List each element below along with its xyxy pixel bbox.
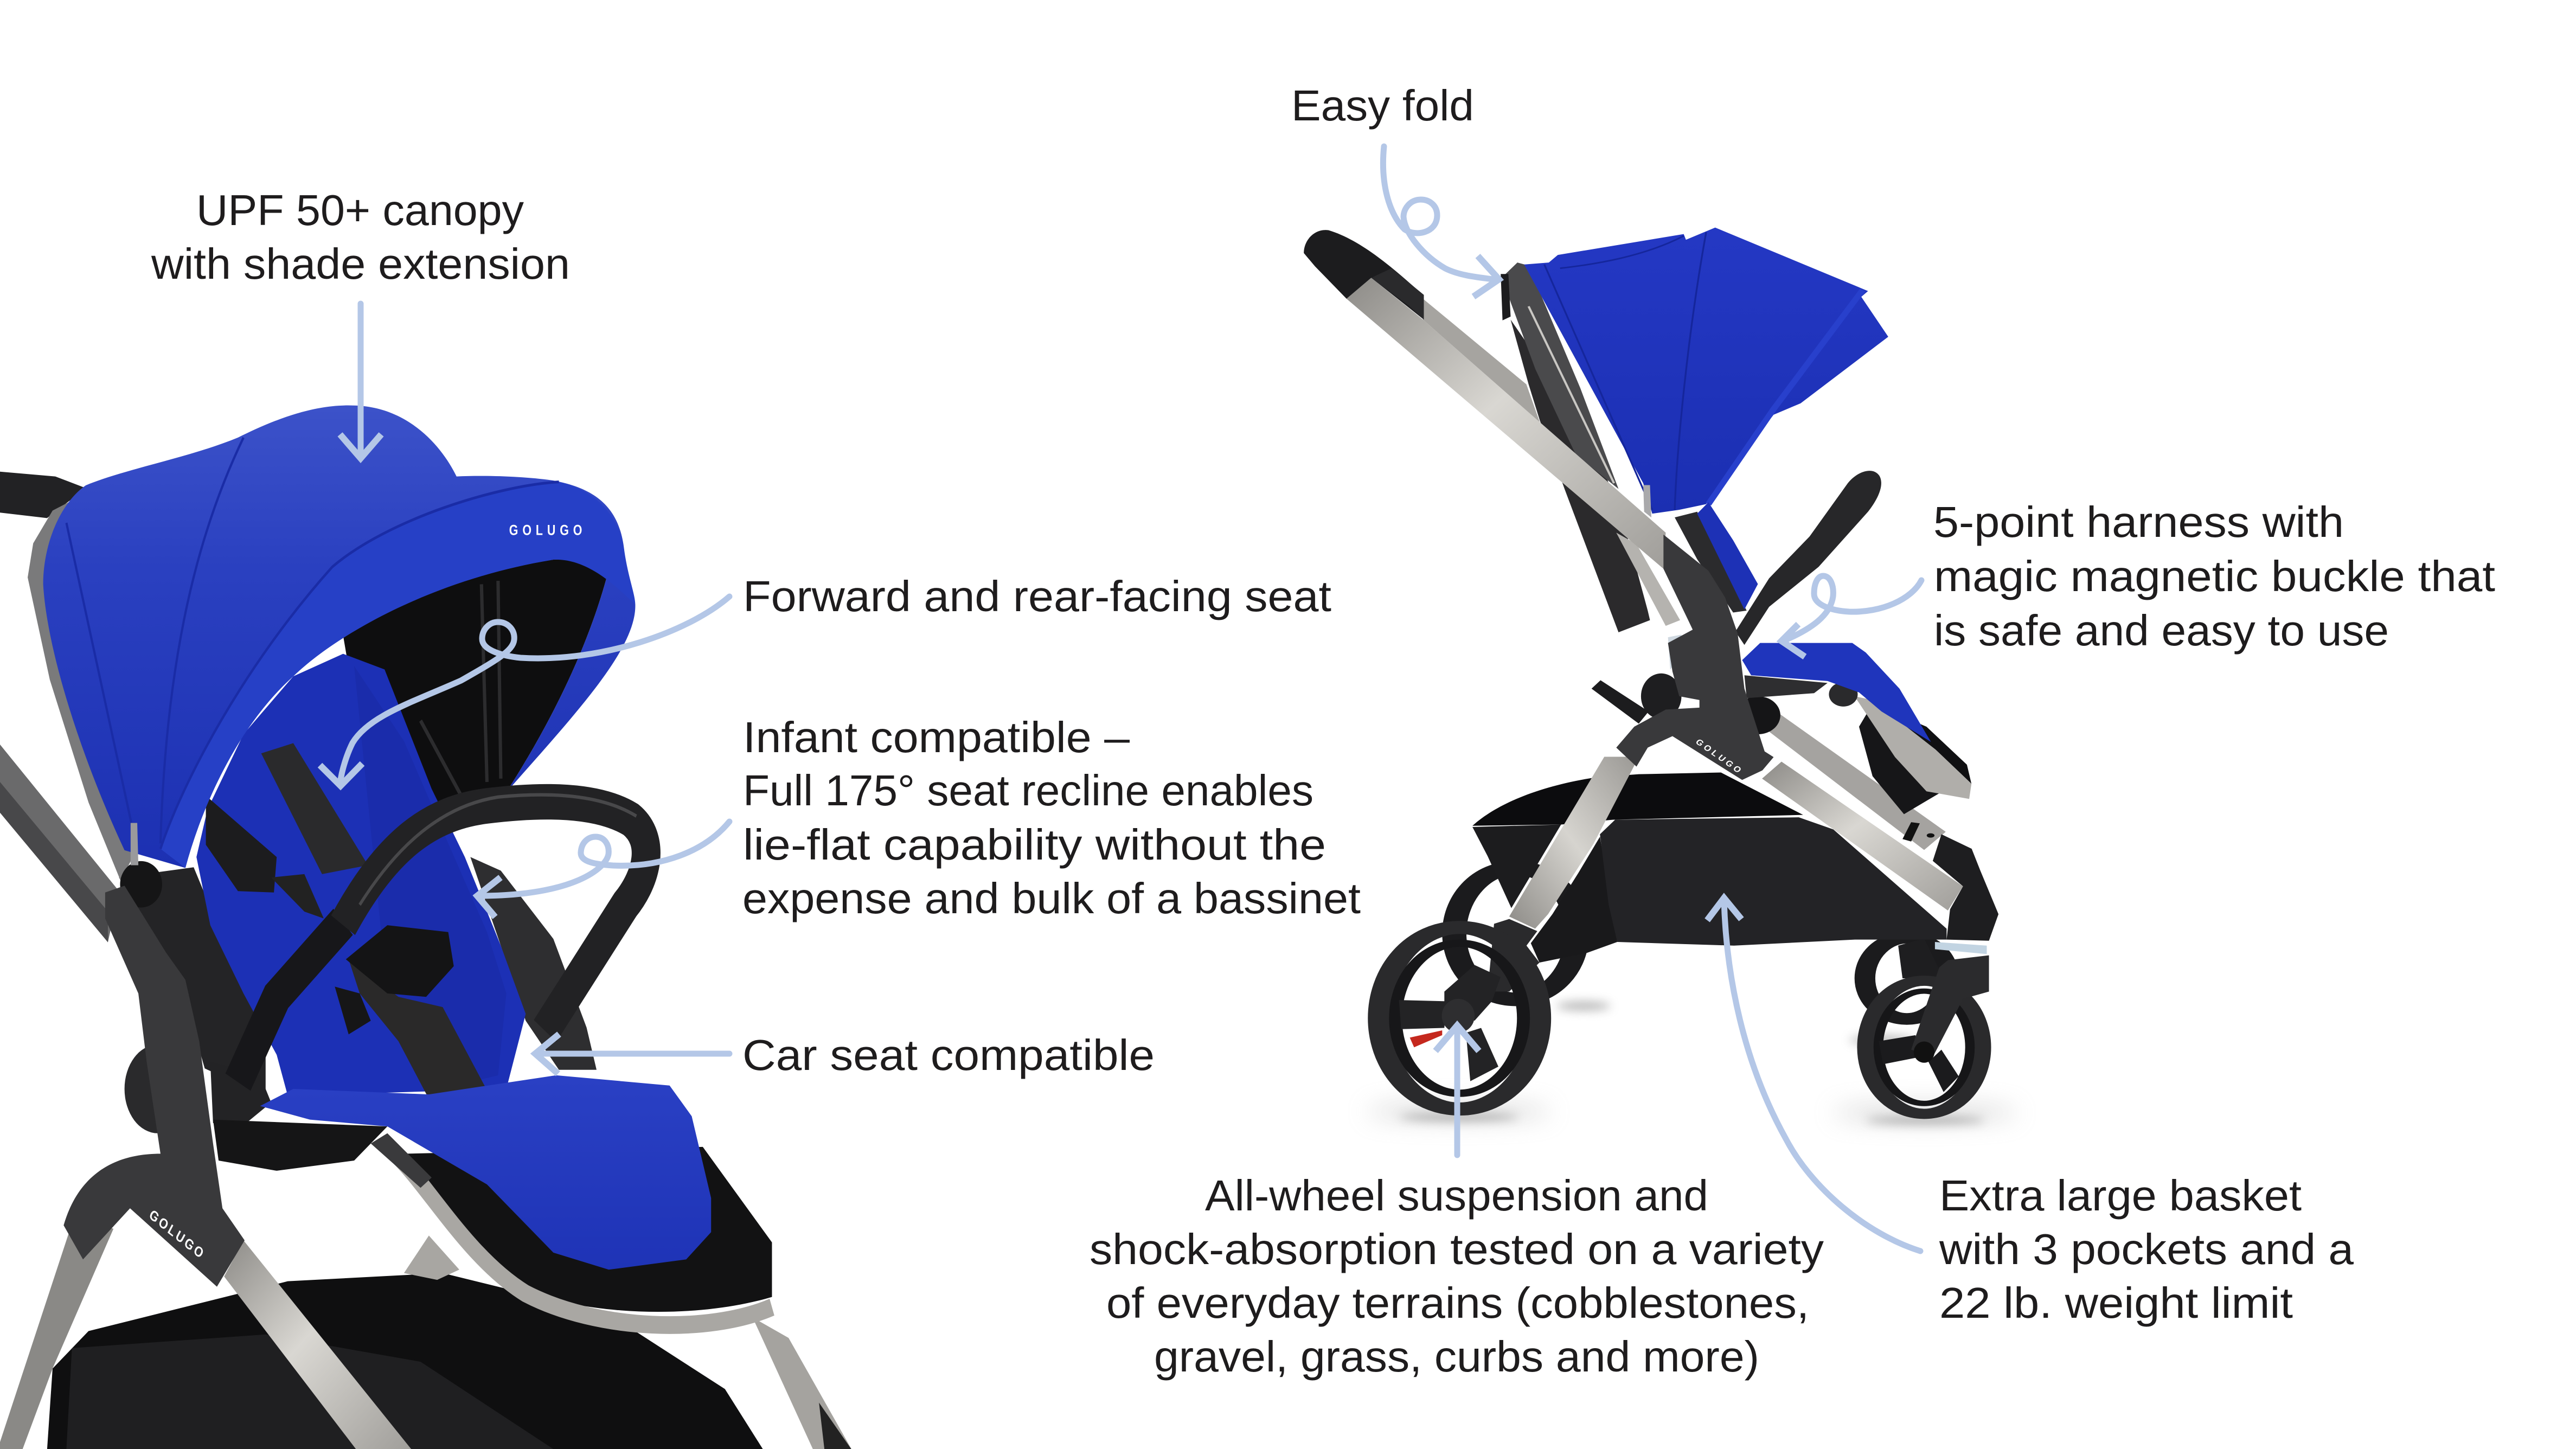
bumper bar <box>238 795 646 1082</box>
text: canopy: with shade extension <box>151 240 570 288</box>
text: basket <box>1939 1171 2354 1327</box>
text: basket: Extra large basket <box>1939 1171 2302 1220</box>
text: suspension <box>1090 1171 1824 1381</box>
blue seat back <box>196 654 526 1096</box>
text: canopy: UPF 50+ canopy <box>196 186 524 234</box>
canopy logo: GOLUGO <box>509 523 582 538</box>
dark panel between frame and seat <box>119 867 266 1096</box>
bumper arm <box>1735 471 1881 645</box>
arrow: easy fold <box>1383 146 1499 297</box>
harness straps and buckle <box>206 743 488 1096</box>
footrest rail <box>1765 709 1946 850</box>
left stroller close-up photo <box>0 406 852 1449</box>
silver legs <box>1509 757 1963 928</box>
push handle <box>1304 230 1424 319</box>
arrow: forward and rear-facing seat <box>320 597 729 786</box>
dark hip frame <box>63 886 387 1287</box>
blue canopy <box>43 406 635 868</box>
canopy grey edge <box>1501 262 1618 489</box>
big front wheel <box>1380 927 1540 1109</box>
text: suspension: shock-absorption tested on a variety <box>1090 1225 1824 1273</box>
text: canopy <box>151 186 570 288</box>
blue canopy side <box>1524 228 1888 517</box>
small front wheel <box>1866 956 1989 1114</box>
footrest tray with silver rim <box>371 1133 772 1325</box>
front fork <box>1488 919 1540 992</box>
rear fork post and band <box>1933 834 1998 954</box>
text: infant compatible: expense and bulk of a bassinet <box>742 874 1361 922</box>
ground shadows <box>1367 1002 2017 1124</box>
text: seat direction: Forward and rear-facing seat <box>743 572 1331 620</box>
frame logo: GOLUGO <box>147 1207 206 1262</box>
text: suspension: of everyday terrains (cobblestones, <box>1106 1279 1809 1327</box>
dark seat back panel <box>1510 319 1650 632</box>
rear-side wheels <box>1454 868 1949 1019</box>
text: infant compatible: Full 175° seat recline enables <box>743 766 1313 815</box>
text: car seat: Car seat compatible <box>742 1031 1155 1079</box>
seat recess and interior <box>343 560 607 806</box>
rear fork behind <box>1898 938 1944 978</box>
arrow: suspension <box>1436 1025 1479 1155</box>
long frame tube <box>0 745 119 943</box>
text: basket: with 3 pockets and a <box>1939 1225 2354 1273</box>
upper frame and canopy <box>1304 228 1971 814</box>
canopy hinge <box>120 823 162 907</box>
storage basket <box>47 1273 764 1449</box>
silver handle tubes <box>1347 278 1665 569</box>
seat sliver behind hub <box>1675 502 1758 613</box>
text: infant compatible: Infant compatible – <box>743 713 1130 761</box>
text: infant compatible: lie-flat capability without the <box>743 820 1326 869</box>
frame logo: GOLUGO <box>1694 738 1743 775</box>
pull strap and wheels behind hub <box>1592 634 1780 734</box>
arrow: harness <box>1782 576 1921 657</box>
canopy back frame edge <box>28 494 133 881</box>
text: easy fold: Easy fold <box>1291 81 1474 130</box>
rear handlebar <box>0 472 87 518</box>
basket <box>1472 773 1946 963</box>
text: infant compatible <box>742 713 1361 922</box>
text: suspension: gravel, grass, curbs and more) <box>1154 1332 1759 1381</box>
blue leg rest <box>260 1075 711 1270</box>
under-seat bracket <box>1745 675 1828 698</box>
text: harness: 5-point harness with <box>1933 498 2344 546</box>
text: suspension: All-wheel suspension and <box>1205 1171 1708 1220</box>
text: basket: 22 lb. weight limit <box>1939 1279 2293 1327</box>
rear arm behind seat <box>470 857 597 1070</box>
arrow: infant compatible <box>477 822 729 917</box>
silver frame legs <box>0 1215 852 1449</box>
text: harness: is safe and easy to use <box>1934 606 2389 655</box>
footrest tray <box>1829 682 1971 814</box>
lower chassis <box>1380 709 1998 1114</box>
text: harness <box>1933 498 2495 655</box>
arrow: canopy <box>340 304 381 458</box>
text: harness: magic magnetic buckle that <box>1934 552 2495 600</box>
dark hip frame <box>1616 535 1773 780</box>
arrow: basket <box>1707 898 1920 1251</box>
arrow: car seat compatible <box>535 1034 729 1074</box>
silver under rod <box>1616 533 1680 626</box>
blue footrest <box>1742 643 1931 742</box>
right stroller full side view <box>1304 228 2017 1124</box>
